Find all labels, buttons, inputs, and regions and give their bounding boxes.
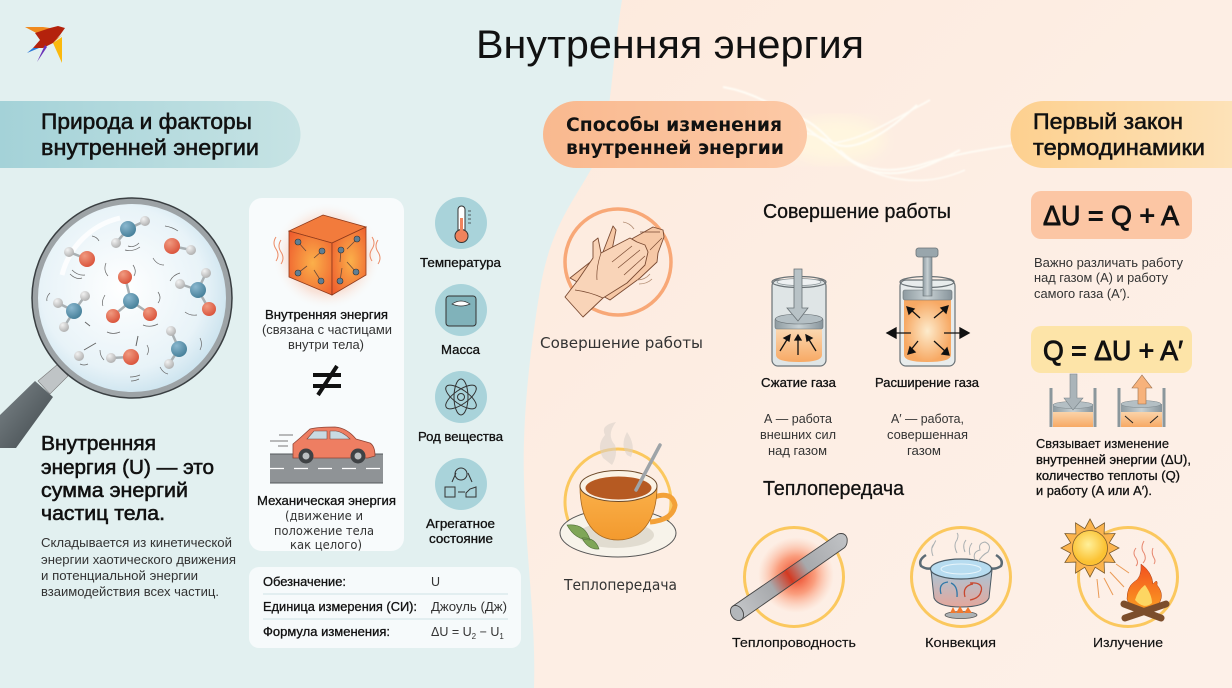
table: quantity facts: − U <box>476 625 499 639</box>
heading: nature: Природа и факторы <box>41 109 252 134</box>
text block: difference note: над газом (А) и работу <box>1034 271 1169 285</box>
text block: work A: внешних сил <box>760 428 836 442</box>
label: internal energy <box>262 308 392 352</box>
diagram: gas compression <box>772 269 826 366</box>
text block: definition: Внутренняя <box>41 433 156 455</box>
icon: cup of tea <box>560 422 676 557</box>
panel: ways of changing energy <box>540 101 1178 650</box>
text block: relation: внутренней энергии (ΔU), <box>1036 453 1191 467</box>
label: convection: Конвекция <box>925 635 996 650</box>
icon: rubbing hands <box>565 209 671 317</box>
formula: Q <box>1031 326 1192 373</box>
factor: temperature: Температура <box>420 256 501 270</box>
factor: mass <box>435 284 487 357</box>
formula: delta U: ΔU = Q + A <box>1043 200 1179 231</box>
text block: definition: энергия (U) — это <box>41 457 214 479</box>
diagram: gas expansion <box>887 248 969 366</box>
text block: difference note: самого газа (А′). <box>1034 287 1130 301</box>
heading: nature <box>0 101 300 168</box>
heading: work: Совершение работы <box>763 201 951 223</box>
table: quantity facts: 2 <box>472 632 477 641</box>
text block: work A <box>760 412 836 458</box>
label: mechanical energy: Механическая энергия <box>257 493 396 508</box>
text block: relation: количество теплоты (Q) <box>1036 469 1180 483</box>
text block: difference note: Важно различать работу <box>1034 256 1184 270</box>
text block: relation <box>1036 437 1191 498</box>
heading: ways <box>543 101 807 168</box>
label: radiation: Излучение <box>1093 635 1163 650</box>
factor: temperature <box>420 197 501 270</box>
table: quantity facts: ΔU = U <box>431 625 472 639</box>
factor: mass: Масса <box>441 343 480 357</box>
text block: work A prime: А′ — работа, <box>891 412 964 426</box>
text block: definition: сумма энергий <box>41 480 188 502</box>
table: quantity facts <box>249 567 521 648</box>
icon: logo bird <box>25 26 65 63</box>
label: expansion: Расширение газа <box>875 376 979 390</box>
table: quantity facts: Формула изменения: <box>263 625 390 639</box>
table: quantity facts: Джоуль (Дж) <box>431 600 507 614</box>
text block: definition <box>41 433 214 525</box>
label: work: Совершение работы <box>540 334 703 352</box>
text block: work A: А — работа <box>764 412 832 426</box>
label: conduction: Теплопроводность <box>732 635 856 650</box>
panel: internal vs mechanical energy <box>249 198 404 552</box>
formula: delta U <box>1031 191 1192 239</box>
panel: first law of thermodynamics <box>1010 101 1232 498</box>
text block: work A prime: совершенная <box>887 428 968 442</box>
heading: ways: Способы изменения <box>566 114 782 136</box>
heading: heat transfer: Теплопередача <box>763 478 905 500</box>
table: quantity facts: 1 <box>499 632 504 641</box>
text block: explanation: энергии хаотического движения <box>41 553 236 567</box>
text block: work A prime: газом <box>907 444 941 458</box>
heading: first law: Первый закон <box>1033 109 1183 134</box>
label: internal energy: внутри тела) <box>288 338 364 352</box>
icon: car on road <box>270 427 383 483</box>
text block: explanation <box>41 536 236 599</box>
label: mechanical energy: (движение и <box>285 509 363 523</box>
label: mechanical energy: как целого) <box>290 538 362 552</box>
text block: difference note <box>1034 256 1184 301</box>
table: quantity facts: Единица измерения (СИ): <box>263 600 417 614</box>
factor: substance <box>418 371 503 444</box>
factor: state of matter: Агрегатное <box>426 517 495 531</box>
label: internal energy: Внутренняя энергия <box>265 308 388 322</box>
icon: radiation sun and fire <box>1061 519 1178 626</box>
label: heat transfer: Теплопередача <box>563 576 677 594</box>
label: mechanical energy: положение тела <box>274 524 374 538</box>
factor: substance: Род вещества <box>418 430 503 444</box>
text block: relation: и работу (А или А′). <box>1036 484 1152 498</box>
text block: relation: Связывает изменение <box>1036 437 1169 451</box>
heading: ways: внутренней энергии <box>566 137 784 159</box>
table: quantity facts: U <box>431 575 440 589</box>
text block: work A: над газом <box>768 444 827 458</box>
factor: state of matter <box>426 458 495 546</box>
heading: nature: внутренней энергии <box>41 135 259 160</box>
text block: explanation: Складывается из кинетической <box>41 536 232 550</box>
icon: magnifying glass with molecules <box>0 198 232 448</box>
icon: mini piston compress <box>1051 374 1095 427</box>
text block: explanation: и потенциальной энергии <box>41 569 198 583</box>
icon: mini piston expand <box>1119 375 1164 427</box>
formula: Q: Q = ΔU + A′ <box>1043 335 1183 366</box>
label: mechanical energy <box>257 493 396 552</box>
factor: state of matter: состояние <box>429 532 493 546</box>
icon: not equal sign <box>313 366 341 395</box>
icon: heat conduction rod <box>728 528 847 626</box>
icon: convection pot <box>912 528 1010 626</box>
heading: first law <box>1010 101 1232 168</box>
label: compression: Сжатие газа <box>761 376 836 390</box>
title: Внутренняя энергия <box>476 23 864 67</box>
text block: definition: частиц тела. <box>41 503 165 525</box>
heading: first law: термодинамики <box>1033 135 1205 160</box>
panel: nature and factors <box>0 101 521 648</box>
text block: work A prime <box>887 412 968 458</box>
label: internal energy: (связана с частицами <box>262 323 392 337</box>
icon: hot cube <box>272 202 382 310</box>
table: quantity facts: Обезначение: <box>263 575 346 589</box>
text block: explanation: взаимодействия всех частиц. <box>41 585 219 599</box>
